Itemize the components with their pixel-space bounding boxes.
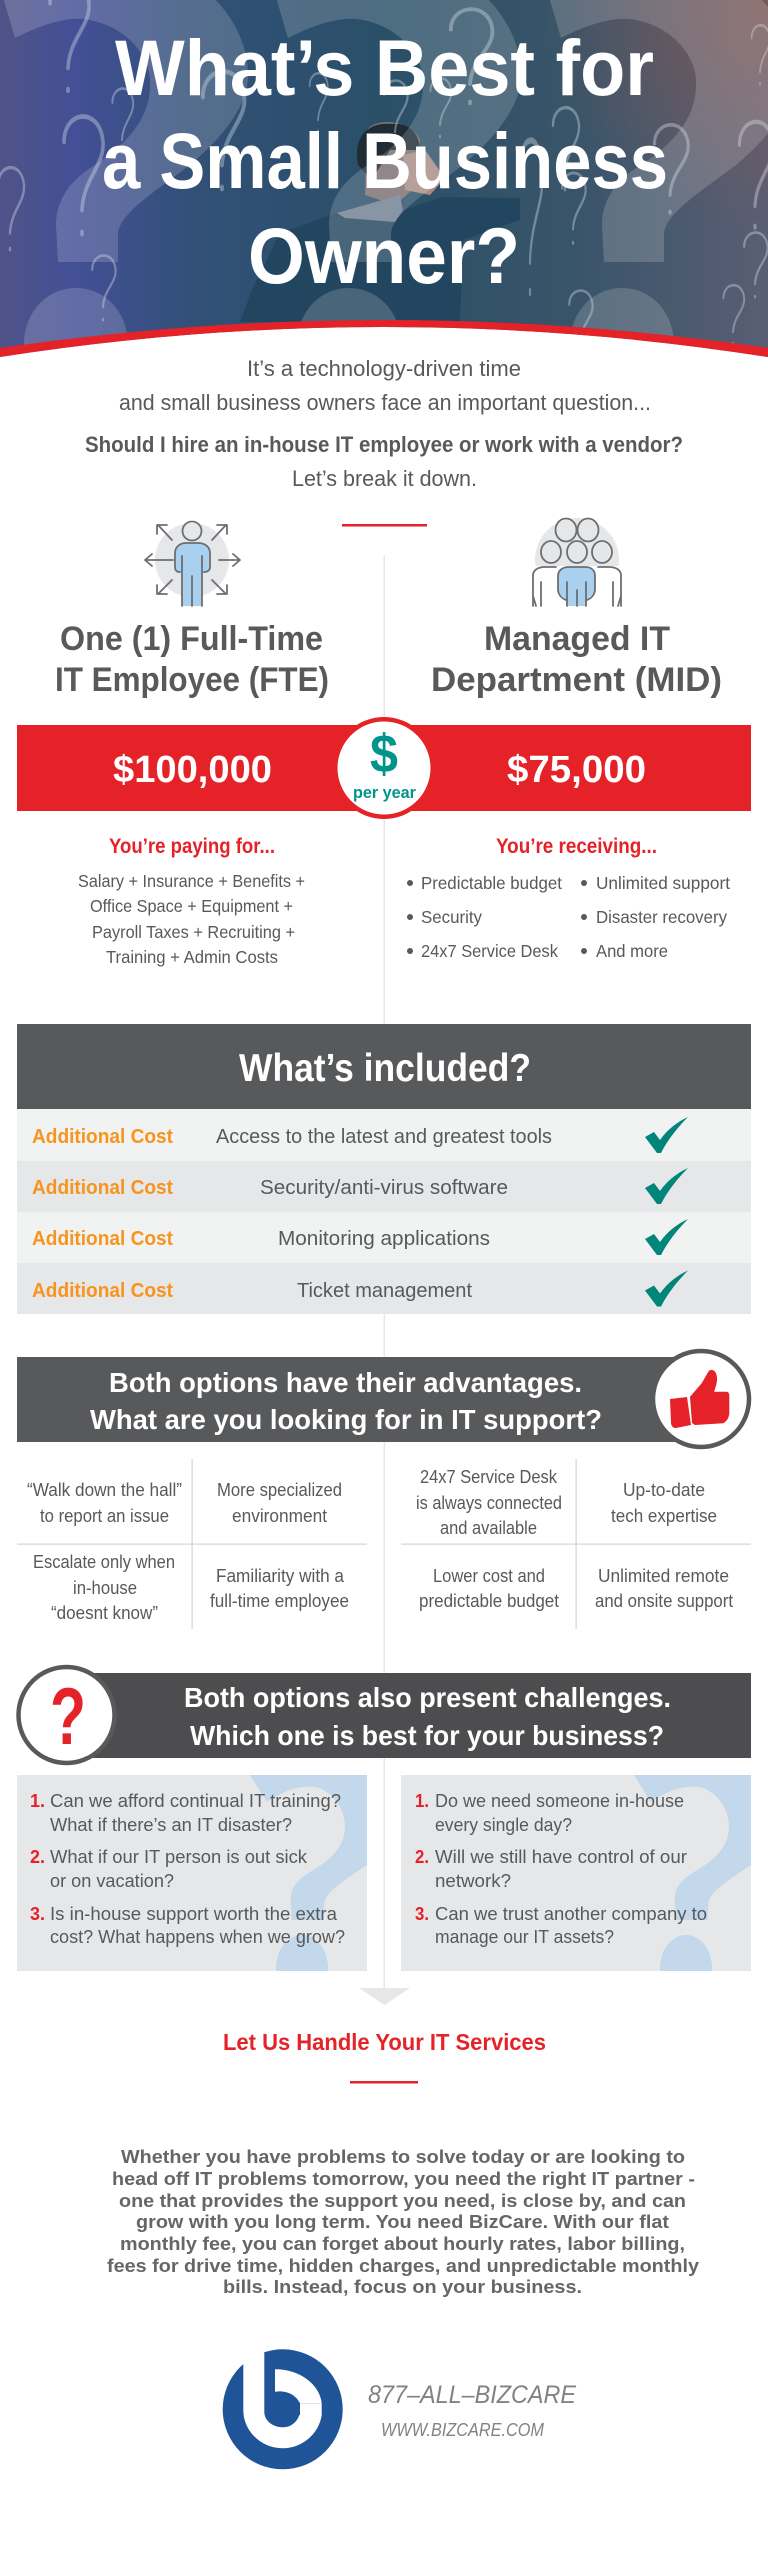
closing paragraph: one that provides the support you need, is close by, and can xyxy=(119,2191,686,2211)
contact details: WWW.BIZCARE.COM xyxy=(381,2419,545,2440)
advantages grid: FTE: to report an issue xyxy=(40,1506,169,1526)
advantages grid: MID: Unlimited remote xyxy=(598,1566,729,1586)
challenges banner: Which one is best for your business? xyxy=(190,1720,664,1751)
red curved divider xyxy=(0,320,768,380)
heading: What’s included? xyxy=(239,1047,531,1090)
panel: MID challenges: 3. xyxy=(415,1904,429,1924)
paying for list xyxy=(78,835,305,967)
title xyxy=(102,23,668,300)
receiving list: Disaster recovery xyxy=(596,907,727,927)
man seen from behind xyxy=(240,122,520,322)
advantages banner: Both options have their advantages. xyxy=(109,1367,582,1398)
intro text xyxy=(85,356,683,491)
panel: MID challenges: Will we still have control of our xyxy=(435,1846,687,1867)
intro text: It’s a technology-driven time xyxy=(247,356,521,381)
panel: MID challenges: manage our IT assets? xyxy=(435,1926,614,1947)
FTE price: $100,000 xyxy=(113,749,272,791)
panel: FTE challenges: or on vacation? xyxy=(50,1870,174,1891)
panel: MID challenges: Do we need someone in-house xyxy=(435,1790,684,1811)
paying for list: You’re paying for... xyxy=(109,835,275,858)
panel: MID challenges: every single day? xyxy=(435,1814,572,1835)
per year badge xyxy=(333,717,435,819)
advantages grid: FTE xyxy=(17,1459,367,1629)
advantages grid: FTE: “doesnt know” xyxy=(51,1603,158,1623)
closing paragraph: head off IT problems tomorrow, you need the right IT partner - xyxy=(112,2169,695,2189)
center divider line xyxy=(384,555,385,1988)
advantages grid: MID xyxy=(401,1459,751,1629)
red rule xyxy=(342,524,427,526)
contact details xyxy=(368,2381,576,2440)
receiving list: Security xyxy=(421,907,482,927)
panel: FTE challenges xyxy=(17,1775,367,1971)
panel: MID challenges xyxy=(401,1775,751,1971)
panel: FTE challenges: 2. xyxy=(30,1847,45,1867)
advantages grid: FTE: environment xyxy=(232,1506,327,1526)
per year badge: $ xyxy=(370,724,398,784)
closing paragraph: monthly fee, you can forget about hourly rates, labor billing, xyxy=(120,2234,685,2254)
intro text: Let’s break it down. xyxy=(292,466,477,491)
panel: FTE challenges: What if our IT person is out sick xyxy=(50,1846,308,1867)
call to action heading: Let Us Handle Your IT Services xyxy=(223,2029,546,2055)
advantages grid: MID: predictable budget xyxy=(419,1591,559,1611)
title: a Small Business xyxy=(102,116,668,205)
icon: BizCare logo xyxy=(223,2340,343,2469)
advantages grid: MID: tech expertise xyxy=(611,1506,717,1526)
paying for list: Payroll Taxes + Recruiting + xyxy=(92,922,295,942)
panel: FTE challenges: What if there’s an IT disaster? xyxy=(50,1814,292,1835)
contact details: 877–ALL–BIZCARE xyxy=(368,2381,576,2409)
closing paragraph: bills. Instead, focus on your business. xyxy=(223,2277,582,2297)
panel: FTE challenges: 1. xyxy=(30,1791,45,1811)
panel: MID challenges: Can we trust another company to xyxy=(435,1903,707,1924)
FTE heading xyxy=(55,620,329,699)
title: What’s Best for xyxy=(115,23,654,112)
advantages grid: FTE: More specialized xyxy=(217,1480,342,1500)
advantages grid: FTE: Escalate only when xyxy=(33,1552,175,1572)
advantages grid: MID: Lower cost and xyxy=(433,1566,545,1586)
large question mark shapes xyxy=(4,0,768,345)
MID heading: Managed IT xyxy=(484,620,670,658)
panel: FTE challenges: Is in-house support worth the extra xyxy=(50,1903,338,1924)
panel: what's included: Additional Cost xyxy=(32,1125,173,1148)
FTE heading: One (1) Full-Time xyxy=(60,620,323,658)
MID heading xyxy=(431,620,722,699)
advantages grid: MID: 24x7 Service Desk xyxy=(420,1467,558,1487)
panel: FTE challenges: cost? What happens when we grow? xyxy=(50,1926,345,1947)
panel: MID challenges: 2. xyxy=(415,1847,429,1867)
closing paragraph: grow with you long term. You need BizCare. With our flat xyxy=(136,2212,669,2232)
icon: thumbs up xyxy=(653,1351,749,1447)
icon: single employee with arrows xyxy=(145,522,240,606)
receiving list: 24x7 Service Desk xyxy=(421,941,558,961)
advantages grid: FTE: full-time employee xyxy=(210,1591,349,1611)
closing paragraph: fees for drive time, hidden charges, and unpredictable monthly xyxy=(107,2256,699,2276)
icon: check marks xyxy=(645,1117,688,1306)
advantages banner xyxy=(17,1351,749,1447)
icon: question mark xyxy=(18,1667,114,1763)
panel: what's included: Security/anti-virus software xyxy=(260,1176,508,1199)
paying for list: Salary + Insurance + Benefits + xyxy=(78,871,305,891)
paying for list: Training + Admin Costs xyxy=(106,947,278,967)
panel: what's included: Additional Cost xyxy=(32,1176,173,1199)
closing paragraph: Whether you have problems to solve today or are looking to xyxy=(121,2147,685,2167)
panel: MID challenges: network? xyxy=(435,1870,511,1891)
panel: what's included: Access to the latest and greatest tools xyxy=(216,1125,552,1148)
advantages banner: What are you looking for in IT support? xyxy=(90,1404,602,1435)
panel: what's included: Additional Cost xyxy=(32,1227,173,1250)
advantages grid: MID: is always connected xyxy=(416,1493,562,1513)
chalk question marks xyxy=(0,0,768,355)
receiving list: Predictable budget xyxy=(421,873,562,893)
red rule xyxy=(350,2081,418,2084)
per year badge: per year xyxy=(353,783,416,802)
advantages grid: MID: and available xyxy=(440,1518,537,1538)
receiving list: And more xyxy=(596,941,668,961)
advantages grid: FTE: Familiarity with a xyxy=(216,1566,345,1586)
challenges banner xyxy=(18,1667,751,1763)
MID price: $75,000 xyxy=(507,749,646,791)
panel: MID challenges: 1. xyxy=(415,1791,429,1811)
receiving list xyxy=(407,835,730,961)
panel: what's included: Ticket management xyxy=(297,1279,472,1302)
MID heading: Department (MID) xyxy=(431,661,722,699)
header photo background xyxy=(0,0,768,357)
icon: question mark: ? xyxy=(50,1672,86,1762)
advantages grid: MID: Up-to-date xyxy=(623,1480,705,1500)
title: Owner? xyxy=(248,211,520,300)
advantages grid: MID: and onsite support xyxy=(595,1591,733,1611)
panel: FTE challenges: 3. xyxy=(30,1904,45,1924)
price bar xyxy=(17,725,751,811)
advantages grid: FTE: in-house xyxy=(73,1578,137,1598)
receiving list: Unlimited support xyxy=(596,873,730,893)
panel: FTE challenges: Can we afford continual IT training? xyxy=(50,1790,341,1811)
icon: IT team xyxy=(533,518,621,606)
panel: what's included: Monitoring applications xyxy=(278,1227,490,1250)
receiving list: You’re receiving... xyxy=(496,835,657,858)
closing paragraph xyxy=(107,2147,699,2297)
challenges banner: Both options also present challenges. xyxy=(184,1682,671,1713)
intro text: Should I hire an in-house IT employee or work with a vendor? xyxy=(85,432,683,457)
panel: what's included xyxy=(17,1024,751,1314)
intro text: and small business owners face an important question... xyxy=(119,390,651,415)
paying for list: Office Space + Equipment + xyxy=(90,896,293,916)
panel: what's included: Additional Cost xyxy=(32,1279,173,1302)
advantages grid: FTE: “Walk down the hall” xyxy=(27,1480,182,1500)
arrow down xyxy=(359,1988,410,2005)
FTE heading: IT Employee (FTE) xyxy=(55,661,329,699)
